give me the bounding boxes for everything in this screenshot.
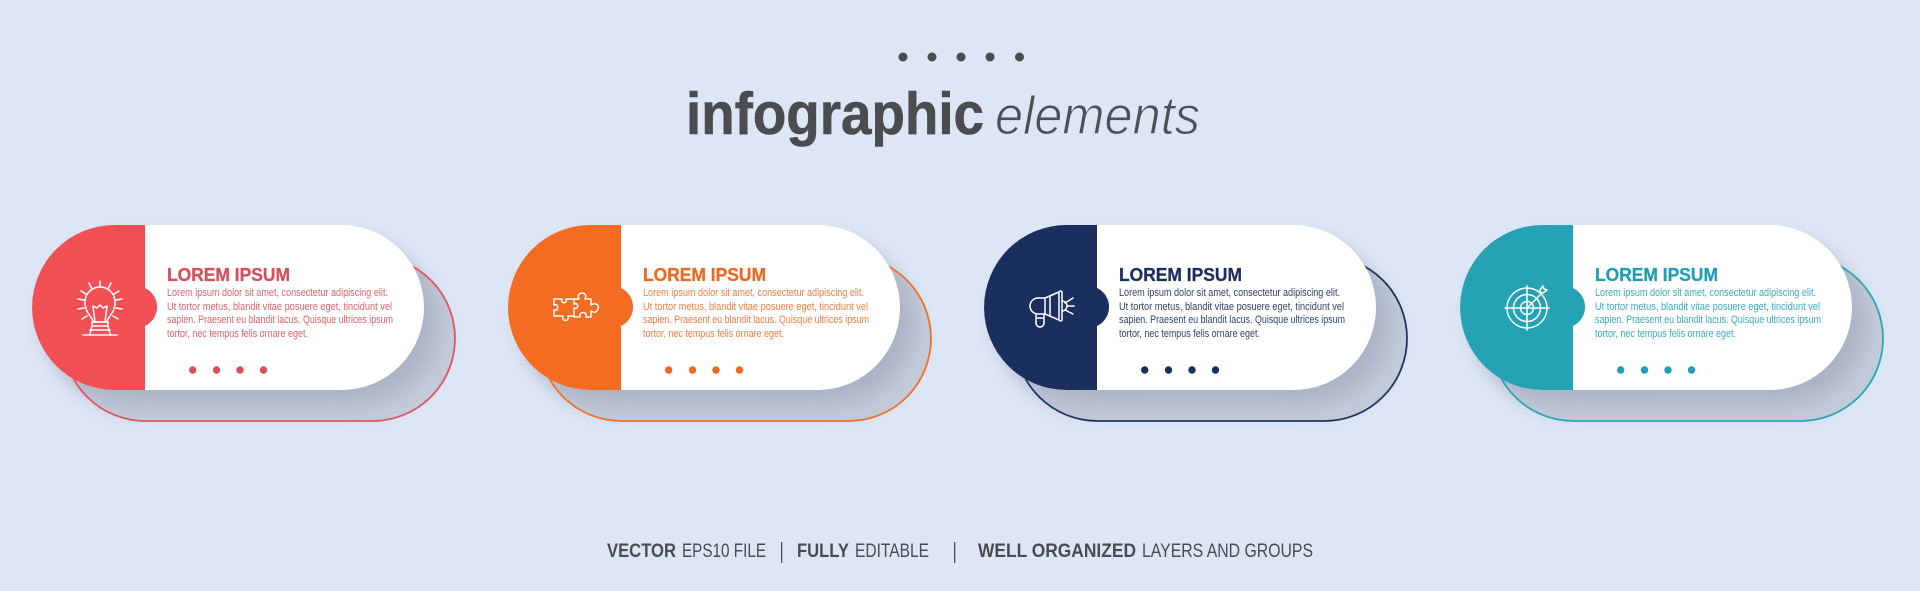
text block: Ut tortor metus, blandit vitae posuere eget, tincidunt vel <box>167 301 392 313</box>
text block: Ut tortor metus, blandit vitae posuere eget, tincidunt vel <box>1119 301 1344 313</box>
text block: sapien. Praesent eu blandit lacus. Quisque ultrices ipsum <box>1595 314 1821 326</box>
text block <box>167 287 393 340</box>
text block <box>1595 287 1821 340</box>
text block: tortor, nec tempus felis ornare eget. <box>643 328 784 340</box>
text block: Lorem ipsum dolor sit amet, consectetur adipiscing elit. <box>643 287 864 299</box>
pagination dots <box>1617 366 1695 374</box>
footer text: WELL ORGANIZED <box>978 541 1136 562</box>
text block: sapien. Praesent eu blandit lacus. Quisque ultrices ipsum <box>167 314 393 326</box>
text block: tortor, nec tempus felis ornare eget. <box>1119 328 1260 340</box>
pagination dots <box>189 366 267 374</box>
text block <box>1119 287 1345 340</box>
footer text <box>607 541 1313 563</box>
icon: light bulb <box>78 281 122 335</box>
footer text: EPS10 FILE <box>682 541 766 562</box>
title: infographic <box>686 81 984 147</box>
icon: megaphone <box>1030 291 1074 327</box>
text block: tortor, nec tempus felis ornare eget. <box>1595 328 1736 340</box>
text block: Ut tortor metus, blandit vitae posuere eget, tincidunt vel <box>1595 301 1820 313</box>
text block: Lorem ipsum dolor sit amet, consectetur adipiscing elit. <box>1595 287 1816 299</box>
heading: LOREM IPSUM <box>643 265 766 285</box>
title: elements <box>995 86 1200 146</box>
text block: Ut tortor metus, blandit vitae posuere eget, tincidunt vel <box>643 301 868 313</box>
text block <box>643 287 869 340</box>
footer text: LAYERS AND GROUPS <box>1142 541 1313 562</box>
footer text: EDITABLE <box>855 541 929 562</box>
footer text: VECTOR <box>607 541 676 562</box>
text block: Lorem ipsum dolor sit amet, consectetur adipiscing elit. <box>1119 287 1340 299</box>
panel: card 2 orange <box>508 225 931 421</box>
panel: card 1 red <box>32 225 455 421</box>
heading: LOREM IPSUM <box>167 265 290 285</box>
pagination dots <box>1141 366 1219 374</box>
footer text: FULLY <box>797 541 849 562</box>
text block: Lorem ipsum dolor sit amet, consectetur adipiscing elit. <box>167 287 388 299</box>
panel: card 3 navy <box>984 225 1407 421</box>
heading: LOREM IPSUM <box>1595 265 1718 285</box>
text block: sapien. Praesent eu blandit lacus. Quisque ultrices ipsum <box>1119 314 1345 326</box>
text block: sapien. Praesent eu blandit lacus. Quisque ultrices ipsum <box>643 314 869 326</box>
decorative dots above title <box>898 52 1024 62</box>
heading: LOREM IPSUM <box>1119 265 1242 285</box>
icon: puzzle pieces <box>554 293 598 320</box>
text block: tortor, nec tempus felis ornare eget. <box>167 328 308 340</box>
panel: card 4 teal <box>1460 225 1883 421</box>
pagination dots <box>665 366 743 374</box>
title <box>686 81 1200 147</box>
icon: target with arrow <box>1505 286 1549 330</box>
